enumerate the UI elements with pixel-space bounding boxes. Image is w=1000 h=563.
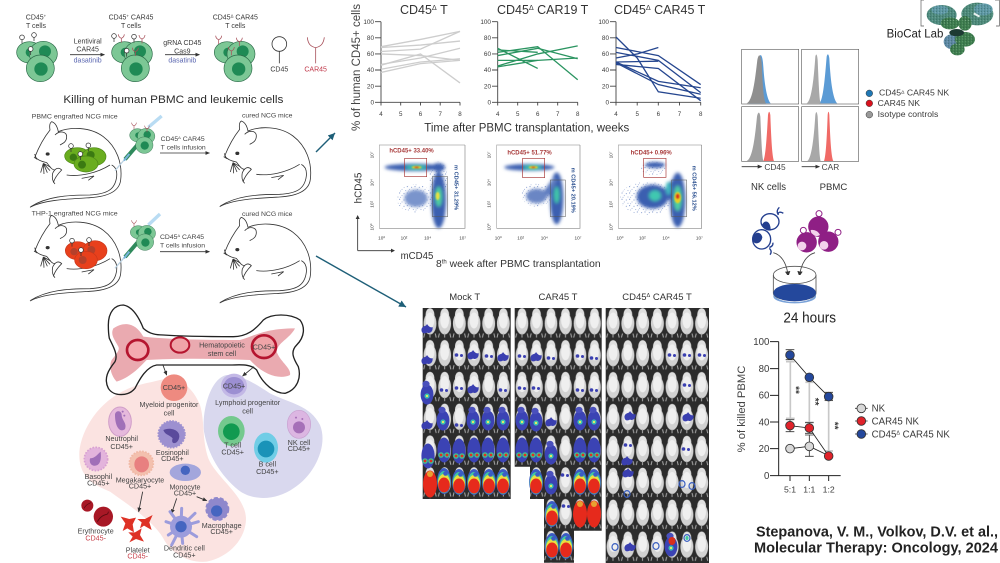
infusion label top: CAR45: [181, 136, 205, 143]
chart: CD45 delta CAR45 T: 5: [635, 111, 639, 118]
monocyte: CD45+: [174, 489, 196, 497]
tumour: green PBMC cells: [65, 143, 106, 172]
neutrophil: [105, 407, 138, 451]
flow plot 3: hCD45+ 0.96%: [631, 150, 672, 156]
icon: culture dish: [773, 266, 816, 303]
icon: antibody structure: [921, 0, 999, 55]
chart: CD45 delta CAR45 T: 60: [602, 51, 609, 58]
legend: histograms: Δ: [901, 90, 905, 96]
labels: stem cell: CD45+: [253, 344, 275, 352]
infusion label bottom: CD45: [160, 234, 177, 241]
chart: CD45 delta T: [363, 3, 462, 118]
chart: CD45 delta T: 80: [367, 35, 374, 42]
arrow: lentiviral transduction: dasatinib: [74, 58, 102, 65]
T cell: [218, 416, 245, 456]
flow axes: hCD45 and mCD45: [353, 172, 434, 262]
flow plot 2: 10⁴: [541, 236, 548, 241]
bone: [106, 305, 303, 395]
megakaryocyte: CD45+: [129, 482, 151, 490]
flow plot 1: 10⁰: [378, 236, 385, 241]
arrow: gRNA CD45 Cas9: Cas9: [174, 48, 191, 55]
macrophage: [202, 498, 242, 536]
chart: CD45 delta CAR19 T: 4: [496, 111, 500, 118]
dendritic cell: CD45+: [173, 551, 196, 559]
infusion label top: T cells infusion: [161, 145, 206, 152]
tumour: red THP-1 cells: [65, 238, 107, 269]
citation: Stepanova, V. M., Volkov, D.V. et al.,: [756, 525, 998, 541]
mouse: cured bottom: cured NCG mice: [242, 211, 293, 218]
progenitor cells: cell: [164, 410, 175, 418]
series: CD45 delta CAR45 NK: [786, 350, 833, 401]
legend: killing chart: Δ: [896, 431, 900, 437]
header: Mock T: Mock T: [449, 292, 480, 303]
flow plot 2: [487, 145, 582, 241]
chart: CD45 delta CAR19 T: CD45: [497, 3, 529, 17]
flow plot 2: 10⁷: [487, 151, 492, 158]
monocyte: Monocyte: [169, 483, 201, 491]
histogram panel: PBMC CAR top: [802, 49, 859, 104]
progenitor cells: [140, 374, 281, 418]
labels: stem cell: stem cell: [208, 350, 237, 358]
label: CD45+ CAR45 T cells: T cells: [121, 23, 142, 30]
syringe with T cells (top): [115, 116, 162, 171]
legend: killing chart: [855, 404, 950, 440]
chart: CD45 delta CAR45 T: CAR45 T: [651, 3, 706, 17]
chart: percent killed PBMC: [736, 337, 950, 495]
chart: CD45 delta T: 6: [419, 111, 423, 118]
chart: percent killed PBMC: 20: [759, 444, 769, 455]
flow plot 1: 10⁰: [369, 223, 374, 231]
chart: CD45 delta CAR45 T: 6: [657, 111, 661, 118]
chart: percent killed PBMC: 0: [764, 471, 769, 482]
flow plot 3: 10⁰: [608, 223, 613, 231]
chart: percent killed PBMC: 1:1: [803, 485, 816, 495]
syringe with T cells (bottom): [115, 214, 160, 268]
arrow: gRNA CD45 Cas9: gRNA CD45: [163, 40, 201, 47]
significance stars: [790, 386, 839, 430]
infusion label top: [160, 135, 209, 153]
mouse panel: THP-1 engrafted: [30, 211, 121, 301]
monocyte: [169, 464, 201, 497]
labels: stem cell: [199, 341, 275, 358]
axis label: CD45: [742, 162, 786, 172]
chart: percent killed PBMC: 60: [759, 391, 769, 402]
flow plot 2: 10⁰: [495, 236, 502, 241]
flow plot 2: m CD45+ 20.19%: [569, 168, 575, 213]
label: CD45 delta CAR45 T cells: Δ: [231, 13, 234, 18]
flow plot 1: hCD45+ 33.40%: [389, 148, 434, 154]
platelets: [121, 515, 153, 561]
chart: CD45 delta CAR19 T: 60: [484, 51, 491, 58]
chart: CD45 delta CAR19 T: 6: [536, 111, 540, 118]
header: CD45 delta CAR45 T: CAR45 T: [650, 292, 692, 303]
chart: percent killed PBMC: 40: [759, 417, 769, 428]
chart: CD45 delta T: 8: [458, 111, 462, 118]
mouse: cured top: cured NCG mice: [242, 112, 293, 119]
flow plot 1: 10²: [369, 201, 374, 208]
chart: CD45 delta CAR19 T: 8: [576, 111, 580, 118]
progenitor cells: CD45+: [223, 382, 245, 390]
flow plot 1: m CD45+ 31.29%: [453, 165, 459, 210]
chart: CD45 delta T: 5: [399, 111, 403, 118]
heading: killing of PBMC and leukemic cells: Killing of human PBMC and leukemic cells: [63, 94, 284, 106]
arrow: teal to imaging: [316, 256, 406, 307]
chart: CD45 delta T: 20: [367, 83, 374, 90]
flow plot 3: m CD45+ 56.12%: [691, 166, 697, 211]
macrophage: Macrophage: [202, 522, 242, 530]
significance stars: **: [790, 386, 801, 394]
icon: target PBMC cells: [797, 211, 841, 252]
cells: CD45+ T cells: [17, 33, 57, 82]
label: CD45+ CAR45 T cells: CD45: [109, 14, 126, 21]
infusion label top: Δ: [178, 135, 181, 140]
NK cell: NK cell: [288, 439, 311, 447]
neutrophil: Neutrophil: [105, 435, 138, 443]
legend: histograms: CAR45 NK: [904, 88, 949, 98]
chart: CD45 delta CAR45 T: 7: [678, 111, 682, 118]
label: CD45+ CAR45 T cells: [109, 13, 154, 30]
legend: killing chart: CD45: [872, 429, 896, 440]
flow plot 1: 10⁴: [369, 179, 374, 186]
flow axes: hCD45 and mCD45: hCD45: [353, 172, 364, 203]
label: CD45+ T cells: T cells: [26, 23, 47, 30]
basophil: [84, 447, 112, 487]
infusion label bottom: T cells infusion: [160, 243, 205, 250]
chart: CD45 delta CAR45 T: [598, 3, 706, 118]
histograms: [742, 0, 999, 327]
macrophage: CD45+: [210, 528, 233, 536]
chart: CD45 delta T: 100: [363, 19, 374, 26]
icon: effector NK cells: [753, 207, 783, 255]
flow plot 3: 10²: [639, 236, 646, 241]
significance bars: [786, 362, 833, 451]
chart: CD45 delta T: 7: [438, 111, 442, 118]
arrow: gRNA CD45 Cas9: dasatinib: [168, 57, 196, 64]
flow plot 1: 10⁴: [424, 236, 431, 241]
chart: percent killed PBMC: 1:2: [823, 485, 835, 495]
arrow: teal to line charts: [316, 133, 335, 152]
histogram panel: NK cells CD45 top: [742, 49, 799, 104]
imaging grid: Mock T: [421, 308, 511, 499]
basophil: CD45+: [87, 479, 110, 487]
chart: CD45 delta CAR19 T: 40: [484, 67, 491, 74]
label: NK cells: NK cells: [751, 182, 786, 193]
chart: CD45 delta CAR19 T: CAR19 T: [534, 3, 589, 17]
mouse: cured bottom: [220, 211, 311, 303]
flow plot 3: 10²: [608, 201, 613, 208]
chart: CD45 delta T: 60: [367, 51, 374, 58]
chart: CD45 delta CAR19 T: [480, 3, 589, 118]
flow cytometry panels: [353, 145, 703, 270]
arrow: lentiviral transduction: CAR45: [76, 47, 99, 54]
infusion label bottom: [160, 233, 209, 252]
label: CD45+ CAR45 T cells: +: [126, 13, 129, 18]
arrow: lentiviral transduction: [70, 38, 104, 65]
chart: CD45 delta T: CD45: [400, 3, 432, 17]
mouse panel: PBMC engrafted: [30, 114, 121, 207]
caption: 8th week: th: [442, 260, 447, 266]
T cell: CD45+: [221, 448, 244, 456]
flow plot 1: 10⁷: [459, 236, 466, 241]
infusion label bottom: Δ: [177, 233, 180, 238]
key: CD45 and CAR45 symbols: CD45: [270, 67, 288, 74]
flow plot 2: 10⁴: [487, 179, 492, 186]
chart: CD45 delta T: 4: [379, 111, 383, 118]
mouse panel: PBMC engrafted: PBMC engrafted NCG mice: [32, 114, 118, 121]
flow plot 1: 10⁷: [369, 151, 374, 158]
top schematic: CAR T cell generation: [17, 13, 327, 303]
significance stars: **: [809, 398, 820, 406]
platelets: CD45-: [127, 553, 149, 561]
B cell: B cell: [259, 461, 276, 469]
flow plot 3: 10⁷: [696, 236, 703, 241]
header: CD45 delta CAR45 T: CD45: [622, 292, 647, 303]
arrow: lentiviral transduction: Lentiviral: [74, 38, 102, 45]
cells: CD45+ CAR45 T cells: [112, 34, 152, 82]
header: CAR45 T: CAR45 T: [539, 292, 578, 303]
x axis label: time after transplantation: Time after PBMC transplantation, weeks: [424, 123, 630, 135]
megakaryocyte: [116, 451, 164, 490]
significance stars: **: [828, 422, 839, 430]
label: CD45 delta CAR45 T cells: T cells: [225, 23, 246, 30]
progenitor cells: cell: [242, 407, 253, 415]
flow plot 1: [369, 145, 466, 241]
label: CD45+ T cells: CD45: [26, 14, 44, 21]
chart: CD45 delta CAR45 T: 20: [602, 83, 609, 90]
B cell: CD45+: [256, 468, 279, 476]
label: CD45+ T cells: [26, 13, 47, 30]
labels: stem cell: Hematopoietic: [199, 341, 245, 349]
chart: CD45 delta CAR45 T: 40: [602, 67, 609, 74]
legend: histograms: [866, 88, 949, 119]
chart: CD45 delta CAR45 T: 100: [598, 19, 609, 26]
chart: CD45 delta CAR19 T: 5: [516, 111, 520, 118]
region: myeloid lineage: [79, 379, 246, 562]
basophil: Basophil: [85, 473, 112, 481]
legend: histograms: CD45: [879, 88, 901, 98]
chart: percent killed PBMC: 5:1: [784, 485, 796, 495]
erythrocytes: [78, 500, 114, 543]
BioCat Lab label: BioCat Lab: [887, 26, 943, 40]
label: PBMC: PBMC: [820, 182, 848, 192]
chart: CD45 delta T: 40: [367, 67, 374, 74]
megakaryocyte: Megakaryocyte: [116, 476, 164, 484]
axis label: CD45: CD45: [764, 162, 786, 172]
flow plot 2: 10²: [517, 236, 524, 241]
flow plot 2: 10⁰: [487, 223, 492, 231]
citation: Molecular Therapy: Oncology, 2024: [754, 541, 998, 557]
eosinophil: CD45+: [161, 455, 184, 463]
flow plot 3: 10⁰: [616, 236, 624, 241]
erythrocytes: Erythrocyte: [78, 528, 114, 536]
histogram panel: PBMC CAR bottom: [802, 107, 859, 161]
imaging grid: CD45 delta CAR45 T: [606, 308, 709, 563]
mouse: cured top: [220, 112, 311, 207]
chart: CD45 delta CAR45 T: CD45: [614, 3, 646, 17]
chart: CD45 delta CAR19 T: 80: [484, 35, 491, 42]
T cell: T cell: [224, 442, 242, 450]
key: CD45 and CAR45 symbols: [270, 37, 327, 74]
platelets: Platelet: [126, 546, 150, 554]
flow plot 3: 10⁴: [608, 179, 613, 186]
cells: CD45 delta CAR45 T cells: [214, 36, 255, 82]
stem cell rings: [127, 335, 276, 360]
chart: CD45 delta CAR19 T: Δ: [529, 5, 534, 12]
B cell: [254, 433, 279, 476]
panel: haematopoiesis: [78, 305, 323, 562]
chart: CD45 delta CAR19 T: 7: [556, 111, 560, 118]
legend: histograms: CAR45 NK: [878, 98, 920, 108]
series: NK: [786, 435, 829, 456]
label: CD45+ CAR45 T cells: CAR45: [129, 14, 154, 21]
key: CD45 and CAR45 symbols: CAR45: [304, 67, 327, 74]
flow plot 2: 10²: [487, 201, 492, 208]
legend: killing chart: CAR45 NK: [872, 416, 919, 427]
neutrophil: CD45+: [110, 443, 133, 451]
NK cell: [287, 410, 311, 453]
citation: [754, 525, 998, 557]
label: CD45 delta CAR45 T cells: CAR45: [233, 14, 258, 21]
label: CD45 delta CAR45 T cells: [213, 13, 258, 30]
infusion label bottom: CAR45: [180, 234, 204, 241]
arrows into dish: [773, 253, 815, 277]
caption: 8th week: week after PBMC transplantation: [447, 259, 601, 270]
panel: bioluminescence imaging: [421, 292, 709, 563]
flow plot 2: hCD45+ 51.77%: [507, 150, 552, 156]
region: lymphoid lineage: [204, 375, 323, 498]
flow plot 3: 10⁷: [608, 151, 613, 158]
y axis label: % of human CD45+ cells: % of human CD45+ cells: [351, 4, 363, 131]
chart: CD45 delta CAR19 T: 20: [484, 83, 491, 90]
flow plot 3: 10⁴: [662, 236, 670, 241]
progenitor cells: Myeloid progenitor: [140, 401, 199, 409]
legend: killing chart: CAR45 NK: [900, 429, 950, 440]
chart: CD45 delta CAR45 T: 80: [602, 35, 609, 42]
erythrocytes: CD45-: [85, 535, 107, 543]
eosinophil: [156, 421, 189, 463]
progenitor cells: Lymphoid progenitor: [215, 399, 281, 407]
chart: CD45 delta T: Δ: [432, 5, 437, 12]
infusion label top: CD45: [161, 136, 178, 143]
dendritic cell: Dendritic cell: [164, 545, 205, 553]
arrow: gRNA CD45 Cas9: [163, 40, 201, 64]
caption: 8th week: 8: [436, 259, 442, 270]
dendritic cell: [164, 508, 205, 559]
chart: CD45 delta T: T: [437, 3, 448, 17]
chart: CD45 delta CAR19 T: 0: [487, 100, 491, 106]
label: CD45+ T cells: +: [44, 13, 47, 18]
flow plot 2: 10⁷: [575, 236, 582, 241]
flow axes: hCD45 and mCD45: mCD45: [401, 251, 434, 262]
chart: percent killed PBMC: 100: [753, 337, 769, 348]
chart: CD45 delta CAR45 T: Δ: [646, 5, 651, 12]
chart: CD45 delta CAR45 T: 8: [699, 111, 703, 118]
chart: CD45 delta CAR45 T: 4: [614, 111, 618, 118]
NK cell: CD45+: [288, 445, 310, 453]
flow plot 1: 10²: [401, 236, 408, 241]
axis label: CAR: CAR: [822, 162, 839, 172]
label: CD45 delta CAR45 T cells: CD45: [213, 14, 231, 21]
flow plot 3: [608, 145, 703, 241]
eosinophil: Eosinophil: [156, 449, 189, 457]
imaging grid: CAR45 T: [515, 308, 602, 563]
header: CD45 delta CAR45 T: Δ: [647, 293, 651, 299]
series: CAR45 NK: [786, 420, 833, 460]
legend: histograms: Isotype controls: [878, 109, 939, 119]
axis label: CAR: [802, 162, 839, 172]
chart: CD45 delta CAR45 T: 0: [605, 100, 609, 106]
lineage arrows: [139, 364, 254, 513]
chart: CD45 delta T: 0: [370, 100, 374, 106]
label: 24 hours: 24 hours: [783, 311, 836, 327]
histogram panel: NK cells CD45 bottom: [742, 107, 799, 161]
chart: percent killed PBMC: 80: [759, 364, 769, 375]
mouse panel: THP-1 engrafted: THP-1 engrafted NCG mice: [32, 211, 118, 218]
chart: percent killed PBMC: % of killed PBMC: [736, 366, 748, 452]
legend: killing chart: NK: [872, 404, 886, 415]
chart: CD45 delta CAR19 T: 100: [480, 19, 491, 26]
progenitor cells: CD45+: [163, 384, 185, 392]
